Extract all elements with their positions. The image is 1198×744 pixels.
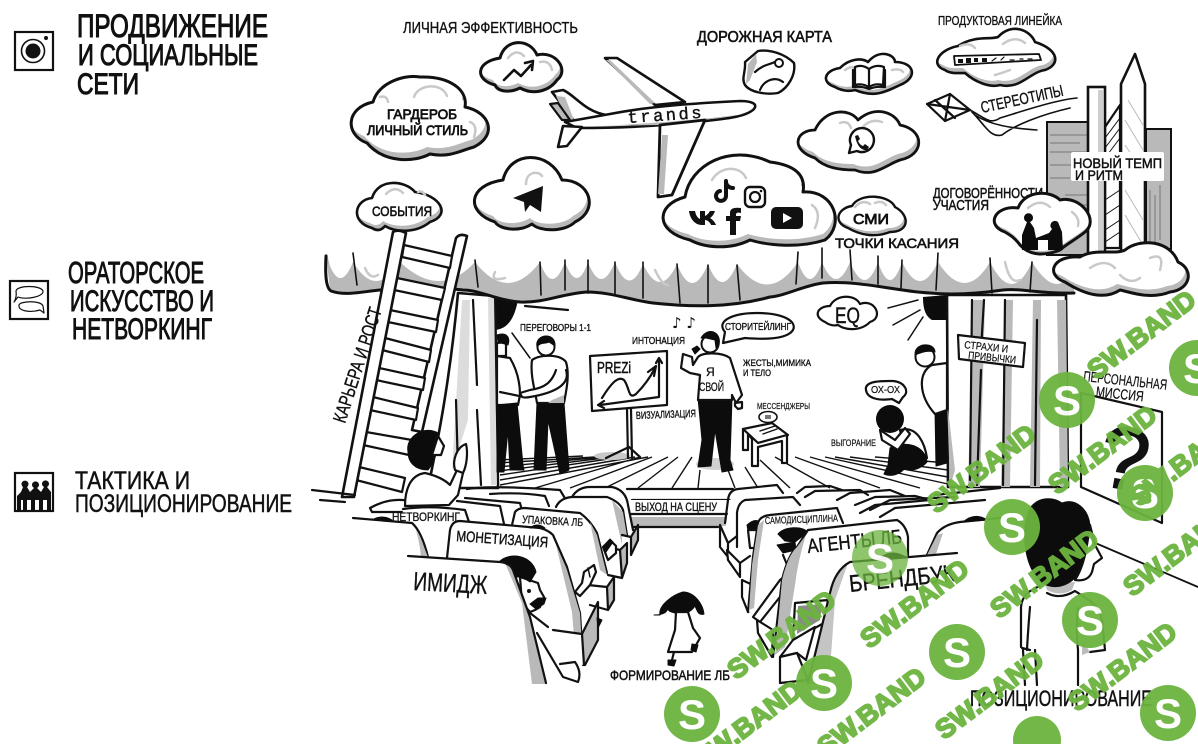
right rail: [412, 235, 467, 432]
man left behind curtain: [497, 334, 524, 472]
label: agreements and participation: ДОГОВОРЁННОСТИ: [933, 185, 1043, 202]
watermark: badge letters: S: [998, 504, 1026, 551]
watermark: brand text: SW.BAND: [722, 584, 842, 685]
seat: brand book: [808, 553, 1015, 684]
cloud: events: [355, 178, 442, 231]
watermark: brand text: SW.BAND: [855, 553, 975, 654]
magazine: [793, 600, 828, 640]
heading: oratory: НЕТВОРКИНГ: [72, 313, 212, 346]
seat: monetization: [447, 521, 602, 665]
watermark: brand text: [688, 284, 1198, 744]
watermark: brand text: SW.BAND: [1063, 616, 1183, 717]
seat label: ИМИДЖ: [413, 566, 488, 600]
armrest box: [757, 620, 773, 657]
cloud: book: [824, 50, 912, 94]
seats left block, back rows: [312, 487, 638, 578]
sleeping passenger: [603, 539, 616, 560]
watermark: brand text: SW.BAND: [922, 418, 1042, 519]
kite with ribbon: [927, 94, 1077, 135]
watermark: brand text: SW.BAND: [930, 644, 1050, 744]
label: burnout: ВЫГОРАНИЕ: [831, 438, 876, 448]
icon: youtube: [771, 207, 803, 229]
armrest four: [582, 602, 598, 665]
icon: instagram: [745, 187, 765, 207]
sign: fears and habits: СТРАХИ И: [964, 339, 1009, 356]
sidebar: tactics and positioning: [15, 467, 292, 518]
peeking man: [915, 345, 947, 466]
watermark: badge letters: S: [1154, 690, 1182, 737]
right curtain: [947, 295, 1068, 487]
icon: speech bubbles: [10, 281, 48, 319]
label: exit to stage: ВЫХОД НА СЦЕНУ: [635, 500, 717, 514]
moustache: [530, 598, 546, 609]
label: touch points: ТОЧКИ КАСАНИЯ: [835, 235, 959, 251]
watermark: badge letters: S: [866, 535, 894, 582]
far-left seats and lines: [312, 490, 355, 502]
lower tail: [558, 126, 582, 147]
cloud: whatsapp: [796, 106, 919, 173]
rear seat rows: [457, 487, 566, 524]
kite: [927, 94, 970, 121]
ladder: [342, 231, 467, 497]
audience person waving: [405, 430, 467, 506]
icon: facebook: [726, 208, 741, 235]
icon: three people: [15, 473, 53, 511]
line of sight to frame: [1093, 542, 1198, 587]
watermark: circle badges: [664, 340, 1198, 744]
cloud: media: [836, 193, 906, 235]
watermark: brand text: SW.BAND: [985, 523, 1105, 624]
armrest two: [620, 543, 627, 578]
speech bubble: storytelling: [722, 313, 794, 343]
dark backstage right: [923, 295, 947, 320]
hair: [500, 556, 536, 582]
label: visualisation: ВИЗУАЛИЗАЦИЯ: [636, 408, 696, 422]
watermark: brand text: SW.BAND: [1043, 399, 1163, 500]
sign: fears and habits: [958, 335, 1025, 367]
burned out person: [876, 405, 927, 475]
seat row one: [725, 485, 783, 530]
man right shaking hands: [512, 333, 569, 474]
heading: promotion: СЕТИ: [77, 68, 139, 101]
armrest three: [607, 577, 614, 610]
presentation board: [590, 351, 667, 458]
icon: telegram: [513, 186, 543, 212]
further seat tops: [797, 486, 1000, 510]
pointed tower: [1121, 54, 1145, 252]
cloud text: СОБЫТИЯ: [372, 203, 432, 219]
white tower: [1088, 87, 1105, 257]
fuselage: [565, 101, 755, 128]
watermark: [664, 284, 1198, 744]
board chart: [598, 358, 662, 408]
armrest right two: [727, 550, 740, 577]
heading: oratory: ИСКУССТВО И: [70, 285, 214, 318]
skyscrapers: [1047, 54, 1171, 257]
watermark: badge letters: S: [943, 629, 971, 676]
label: messengers: МЕССЕНДЖЕРЫ: [757, 402, 810, 411]
left rail: [342, 231, 406, 497]
seat label: НЕТВОРКИНГ: [392, 510, 460, 524]
icon: vk: [689, 211, 716, 225]
icon: book: [853, 66, 885, 89]
cloud: EQ: [818, 297, 877, 329]
label: forming personal brand: ФОРМИРОВАНИЕ ЛБ: [610, 667, 730, 683]
seat: agents of personal brand: [773, 520, 908, 680]
label: personal mission: МИССИЯ: [1095, 384, 1144, 405]
watermark: badge letters: S: [810, 660, 838, 707]
seat label: АГЕНТЫ ЛБ: [806, 526, 903, 558]
label: personal effectiveness: ЛИЧНАЯ ЭФФЕКТИВНОСТЬ: [403, 20, 578, 37]
passenger with sunglasses: [752, 528, 808, 622]
label: intonation: ИНТОНАЦИЯ: [632, 335, 685, 347]
label: product line: ПРОДУКТОВАЯ ЛИНЕЙКА: [938, 13, 1062, 28]
shirt text: Я: [706, 365, 715, 379]
seat: networking: [392, 507, 470, 560]
lower wing: [658, 120, 705, 197]
little girl walking: [654, 592, 704, 666]
seat label: БРЕНДБУК: [848, 560, 956, 598]
heading: tactics: ПОЗИЦИОНИРОВАНИЕ: [75, 490, 292, 518]
cloud: wardrobe and personal style: [348, 69, 488, 160]
armrest one: [631, 525, 638, 555]
label: gestures: ЖЕСТЫ,МИМИКА: [743, 358, 812, 369]
cloud: growth arrow: [479, 38, 562, 92]
aisle seat row two: [555, 497, 630, 552]
left building: [1047, 122, 1089, 255]
stage front with label: [627, 489, 733, 527]
label: new pace and rhythm: НОВЫЙ ТЕМП: [1073, 154, 1162, 171]
rungs: [356, 245, 452, 492]
label: agreements and participation: УЧАСТИЯ: [933, 197, 989, 214]
bubble above table: [759, 412, 777, 422]
label: new pace and rhythm: И РИТМ: [1075, 167, 1123, 183]
plane name: trands: [627, 105, 702, 129]
watermark: badge letters: S: [678, 691, 706, 738]
seats right block, further rows: [860, 500, 1010, 560]
airplane: [550, 58, 755, 197]
shirt text: СВОЙ: [699, 379, 724, 394]
stage floor planks: [498, 456, 948, 488]
heading: promotion: ПРОДВИЖЕНИЕ: [77, 8, 268, 44]
board title: PREZi: [597, 360, 631, 377]
seat label: САМОДИСЦИПЛИНА: [765, 513, 838, 527]
shadow under easel: [594, 452, 630, 460]
cloud: product line: [935, 24, 1055, 86]
face: [1075, 525, 1102, 580]
watermark: brand text: SW.BAND: [1082, 284, 1198, 385]
sidebar: public speaking and networking: [10, 255, 214, 346]
label: negotiations: ПЕРЕГОВОРЫ 1-1: [520, 322, 591, 334]
heading: promotion: И СОЦИАЛЬНЫЕ: [78, 39, 258, 72]
table: [743, 423, 788, 466]
seat row two: [737, 497, 800, 580]
easel: [606, 409, 640, 458]
curtain valance: [326, 248, 1075, 306]
seat label: УПАКОВКА ЛБ: [522, 514, 583, 529]
aisle seat row one: [572, 487, 633, 530]
label: new pace and rhythm: [1071, 152, 1164, 183]
speaker: [681, 332, 742, 472]
seats right block, back rows: [720, 485, 1000, 612]
seat: image: [400, 556, 547, 684]
music notes: ♪ ♪: [672, 314, 696, 332]
personal mission frame: [1081, 393, 1162, 523]
tail fin: [552, 90, 607, 122]
seat: packaging: [512, 508, 616, 610]
torso: [1020, 586, 1105, 685]
seat: back of third row: [353, 517, 429, 558]
cloud: telegram: [472, 152, 589, 230]
right building: [1146, 129, 1171, 249]
product strip: [954, 54, 1041, 65]
face: [520, 577, 544, 612]
icon: handshake silhouettes: [1022, 213, 1063, 250]
upper wing: [605, 58, 685, 105]
question mark: ?: [1092, 405, 1157, 511]
armrest right one: [720, 525, 728, 557]
dark backstage left: [495, 297, 518, 330]
seat: self-discipline: [748, 508, 843, 620]
moustached man: [500, 556, 580, 684]
left curtain: [428, 293, 498, 488]
speech bubble: sighing: ОХ-ОХ: [871, 385, 900, 396]
cloud text: ГАРДЕРОБ: [387, 106, 457, 122]
hand with cards: [575, 565, 596, 596]
cloud: EQ: EQ: [835, 303, 860, 328]
cloud at curtain top right: [1051, 237, 1188, 295]
label: gestures: И ТЕЛО: [743, 368, 771, 379]
label: roadmap: ДОРОЖНАЯ КАРТА: [697, 29, 832, 46]
icon: whatsapp: [849, 128, 874, 153]
passenger profile right: [747, 521, 760, 548]
cloud: handshake: [994, 190, 1090, 254]
icon: tiktok: [716, 181, 733, 201]
icon: map globe: [743, 51, 794, 94]
label: career and growth: КАРЬЕРА И РОСТ: [330, 305, 387, 426]
heading: oratory: ОРАТОРСКОЕ: [68, 255, 204, 290]
body: [525, 610, 580, 684]
cloud text: СМИ: [853, 211, 889, 228]
icon: camera: [15, 32, 53, 70]
hands: [780, 627, 815, 660]
label: stereotypes: СТЕРЕОТИПЫ: [979, 83, 1065, 117]
attention rays: [888, 300, 923, 340]
seat label: МОНЕТИЗАЦИЯ: [456, 528, 549, 551]
icon: trend arrow: [504, 61, 533, 80]
woman seen from behind: [1020, 499, 1105, 685]
magazine reader: [757, 600, 828, 683]
speech bubble: storytelling: СТОРИТЕЙЛИНГ: [725, 320, 791, 333]
watermark: badge letters: S: [1053, 377, 1081, 424]
watermark: badge letters: [678, 345, 1198, 738]
speech bubble: sighing: [866, 381, 906, 403]
sign: fears and habits: ПРИВЫЧКИ: [968, 350, 1017, 367]
watermark: badge letters: S: [1076, 597, 1104, 644]
cloud text: ЛИЧНЫЙ СТИЛЬ: [367, 121, 468, 138]
sidebar: promotion and social networks: [15, 8, 268, 101]
heading: tactics: ТАКТИКА И: [75, 467, 190, 495]
armrest right three: [742, 580, 757, 612]
hair: [1025, 499, 1090, 587]
hatched building: [1105, 105, 1120, 248]
watermark: badge letters: S: [1131, 470, 1159, 517]
cloud: social networks: [661, 149, 835, 247]
ribbon: [970, 98, 1077, 135]
